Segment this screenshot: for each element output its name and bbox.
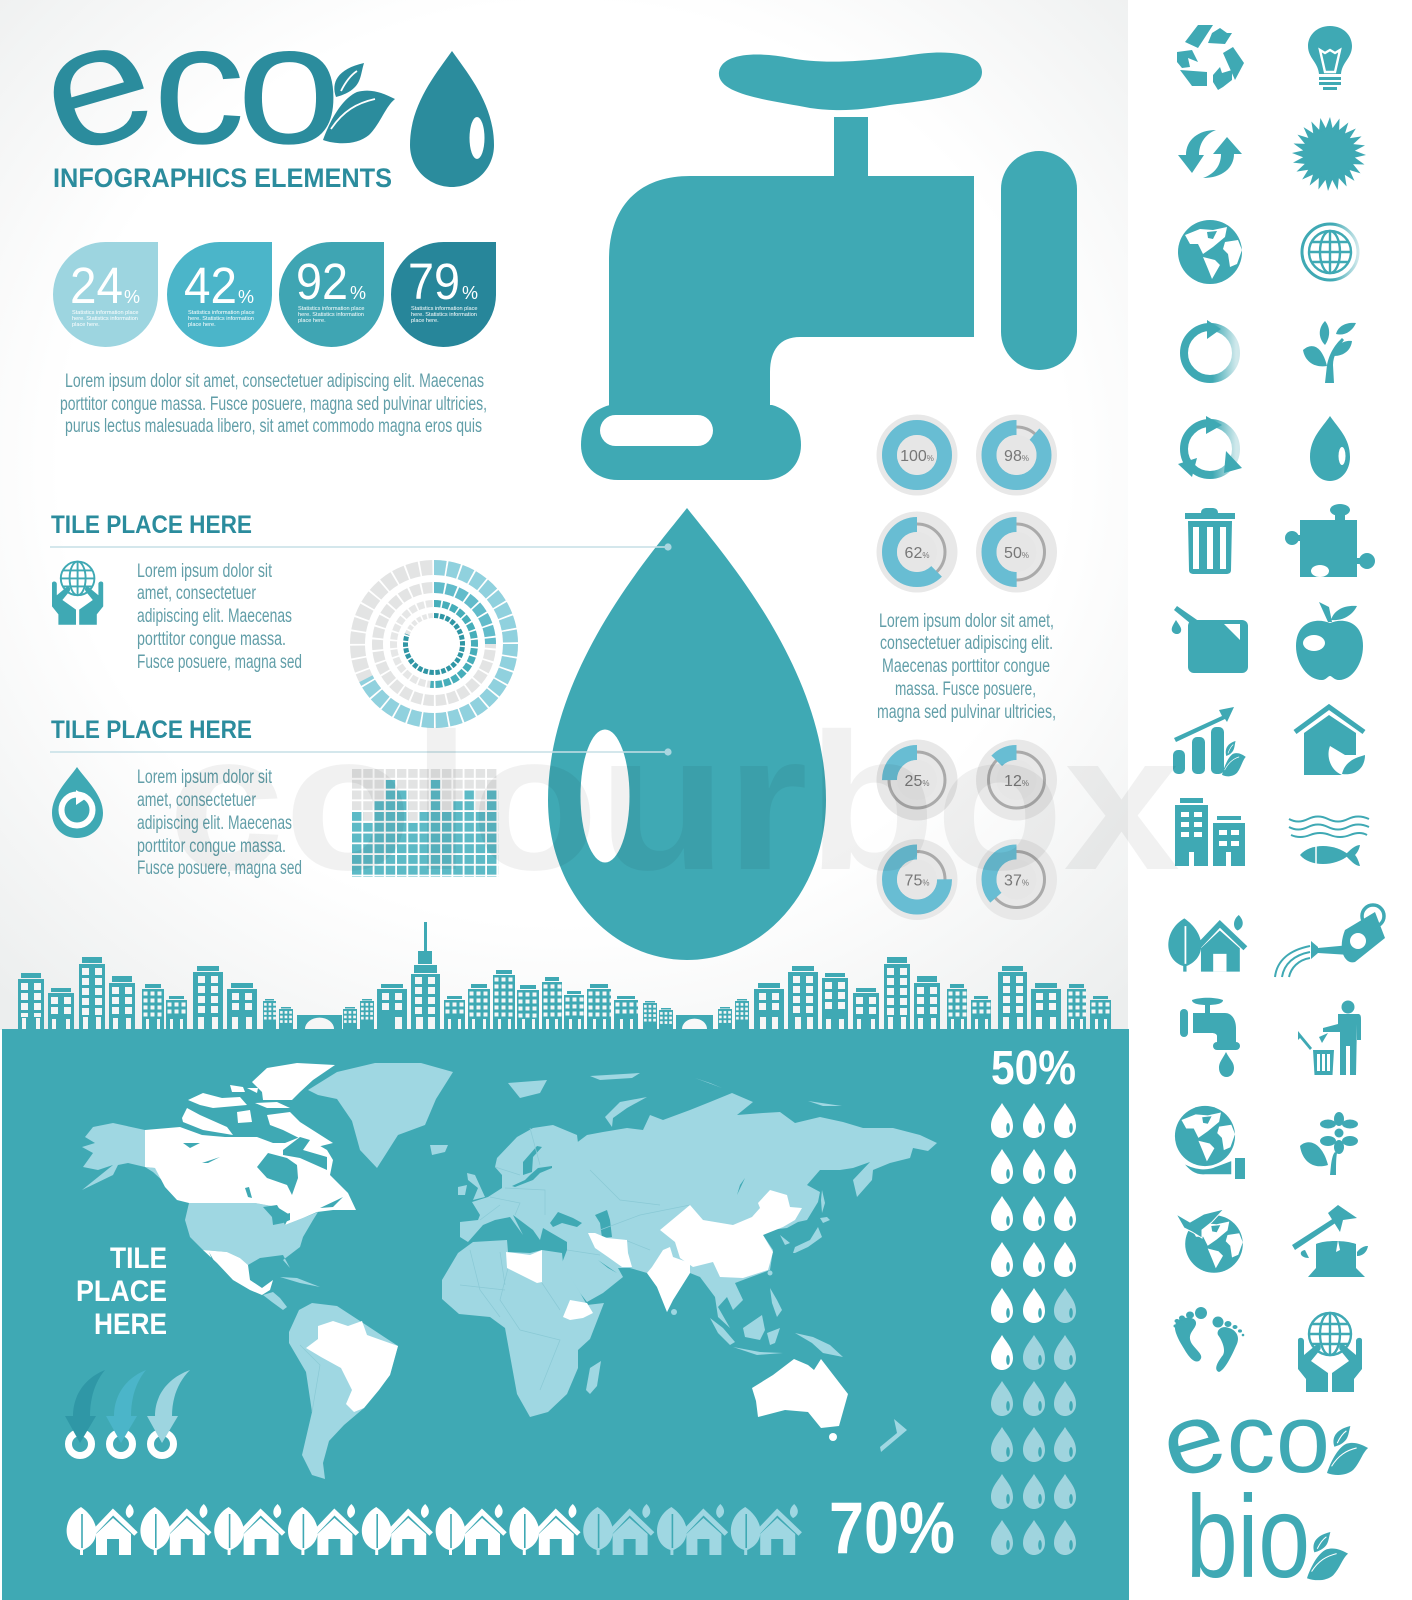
icon: flower [1300,1112,1358,1175]
intro paragraph: Lorem ipsum dolor sit amet, consectetuer adipiscing elit. Maecenas [65,371,484,392]
right paragraph [877,611,1056,723]
icon: jerry can [1172,606,1248,673]
map title [76,1242,167,1341]
text block one: amet, consectetuer [137,583,256,604]
icon: small tap [1180,998,1240,1077]
arrow dark [65,1370,105,1443]
value 50%: 50% [991,1042,1076,1095]
eco mark: e [1149,1379,1237,1499]
donut 37% [976,839,1057,920]
map title: HERE [94,1308,167,1341]
donut 25% [876,740,958,820]
donut 100%: 100% [900,448,934,465]
map: highlighted countries [145,1063,848,1441]
faucet [581,53,1077,480]
icon: apple [1296,602,1363,680]
drop pictogram grid [991,1103,1076,1555]
right paragraph: Maecenas porttitor congue [882,656,1050,677]
icon: eco house [1295,707,1365,775]
stat drop 92%: Statistics information place [298,306,365,312]
eco mark: c [1227,1384,1275,1493]
unfilled houses [583,1504,800,1555]
icon: growth chart [1173,707,1246,776]
watermark: colourbox [168,693,1180,911]
donut 50% [976,512,1057,592]
icon: axe and stump [1292,1205,1368,1277]
stat drop 42% [167,242,272,347]
map title: PLACE [76,1275,167,1308]
icon column [1149,25,1385,1600]
arrow light [147,1370,190,1443]
text block two: amet, consectetuer [137,790,256,811]
logo leaves [323,63,395,143]
icon: two arrows [1178,130,1242,178]
icon: earth in hand [1175,1106,1245,1179]
donut 12%: 12% [1004,773,1029,790]
donut 98% [976,414,1057,496]
stat drop 24%: here. Statistics information [72,316,138,322]
heading two: TILE PLACE HERE [51,716,252,744]
arrow mid [106,1370,146,1443]
text block two: adipiscing elit. Maecenas [137,813,292,834]
icon: sun [1277,102,1381,206]
eco mark: o [1276,1384,1330,1493]
icon: drop [1310,416,1350,481]
stat drop 79%: here. Statistics information [411,312,477,318]
filled houses [67,1504,579,1555]
stat drop 79%: % [462,283,478,303]
stat drop 42%: here. Statistics information [188,316,254,322]
icon: hands holding globe [1298,1313,1362,1392]
world map [82,1063,937,1479]
subtitle: INFOGRAPHICS ELEMENTS [53,163,392,193]
donut 98%: 98% [1004,448,1029,465]
big water drop [548,508,826,960]
right paragraph: magna sed pulvinar ultricies, [877,702,1056,723]
stat drop 92%: % [350,283,366,303]
stat drop 24%: place here. [72,322,100,328]
logo word eco [19,0,341,191]
icon: trash bin [1185,508,1235,574]
stat drop 42%: place here. [188,322,216,328]
donut 62% [876,512,958,592]
map title: TILE [110,1242,167,1275]
icon: buildings [1175,798,1245,866]
text block one: porttitor congue massa. [137,629,286,650]
text block one: Lorem ipsum dolor sit [137,561,273,582]
right paragraph: massa. Fusce posuere, [895,679,1036,700]
intro paragraph [60,371,487,437]
text block two: Lorem ipsum dolor sit [137,767,273,788]
stat drop 92% [279,242,384,347]
text block two [137,767,302,879]
stat drop 92%: here. Statistics information [298,312,364,318]
intro paragraph: purus lectus malesuada libero, sit amet commodo magna eros quis [65,416,482,437]
text block two: Fusce posuere, magna sed [137,858,302,879]
text block two: porttitor congue massa. [137,836,286,857]
donut 75% [876,839,958,920]
text block one: Fusce posuere, magna sed [137,652,302,673]
icon: drop with circular arrow [52,767,103,838]
icon: fish and waves [1289,816,1369,866]
stat drop 24%: % [124,287,140,307]
light drops [991,1288,1076,1555]
icon: hands holding globe [52,562,103,625]
icon: puzzle piece [1285,504,1375,577]
map: borders [300,1128,690,1412]
stat drop 92%: place here. [298,318,326,324]
donut 37%: 37% [1004,872,1029,890]
icon: recycle ring [1178,416,1242,477]
icon: ring arrow [1184,320,1236,379]
logo water drop [410,51,494,187]
background [0,0,1128,1030]
teal map panel [2,1029,1129,1600]
connector line one [50,543,672,551]
map: hudson bay and lakes [183,1137,343,1275]
icon: footprints [1174,1307,1244,1372]
stat drop 42%: % [238,287,254,307]
logo: eco infographics elements [19,0,494,193]
house pictogram row 70% [67,1504,800,1555]
value 70%: 70% [829,1488,955,1569]
stat drop 79% [391,242,496,347]
donut 25%: 25% [905,773,929,790]
stat drop 24%: Statistics information place [72,310,139,316]
icon: recycle [1177,25,1244,90]
white drops [991,1103,1076,1370]
stat drop 24%: 24 [70,257,123,314]
icon: person and bin [1298,1000,1361,1075]
map: seas [512,1146,745,1273]
donut 50%: 50% [1004,545,1029,562]
stat drop 92%: 92 [296,253,348,310]
connector line two [50,748,672,756]
city skyline [18,922,1111,1029]
text block one: adipiscing elit. Maecenas [137,606,292,627]
marker rings [68,1432,174,1456]
map: light regions [82,1063,937,1479]
icon: earth [1178,220,1242,284]
text block one [137,561,302,673]
stat drop 24% [53,242,158,347]
arrow markers [65,1370,190,1456]
heading one: TILE PLACE HERE [51,511,252,539]
icon: watering can [1275,905,1385,977]
drop highlights [1006,1123,1073,1550]
donut 62%: 62% [905,545,929,562]
bio mark: bio [1186,1471,1310,1600]
radial segmented chart [358,568,510,720]
icon: globe with ring [1302,224,1358,280]
donut 12% [976,740,1057,820]
icon: sprout [1303,321,1356,383]
donut 100% [876,414,958,496]
icon: plane and earth [1176,1209,1243,1273]
block bar chart [352,769,498,877]
intro paragraph: porttitor congue massa. Fusce posuere, magna sed pulvinar ultricies, [60,394,487,415]
eco mark [1149,1379,1368,1499]
stat drop 79%: 79 [408,253,460,310]
right paragraph: Lorem ipsum dolor sit amet, [879,611,1054,632]
donut 75%: 75% [905,872,929,890]
stat drop 42%: Statistics information place [188,310,255,316]
stat drop 79%: place here. [411,318,439,324]
stat drop 79%: Statistics information place [411,306,478,312]
stat drop 42%: 42 [184,257,237,314]
right paragraph: consectetuer adipiscing elit. [880,633,1053,654]
icon: light bulb [1308,26,1352,90]
icon: leaf house [1168,915,1245,972]
